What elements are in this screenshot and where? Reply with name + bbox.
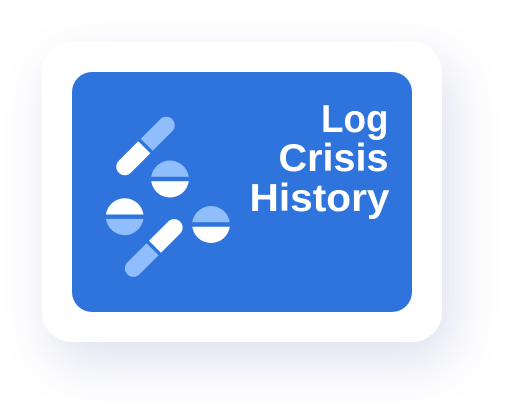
icon: tablet right	[192, 206, 230, 243]
icon: tablet upper	[151, 161, 189, 197]
heading: Log Crisis History: Crisis	[278, 137, 388, 180]
panel: white card with shadow	[42, 42, 442, 342]
panel: blue button	[72, 72, 412, 312]
icon: capsule bottom	[121, 216, 186, 280]
heading: Log Crisis History: History	[250, 177, 390, 220]
heading: Log Crisis History	[250, 98, 390, 220]
heading: Log Crisis History: Log	[321, 98, 388, 141]
icon: capsule top	[113, 113, 178, 179]
icon: pills	[106, 113, 230, 280]
icon: tablet left	[106, 198, 144, 235]
